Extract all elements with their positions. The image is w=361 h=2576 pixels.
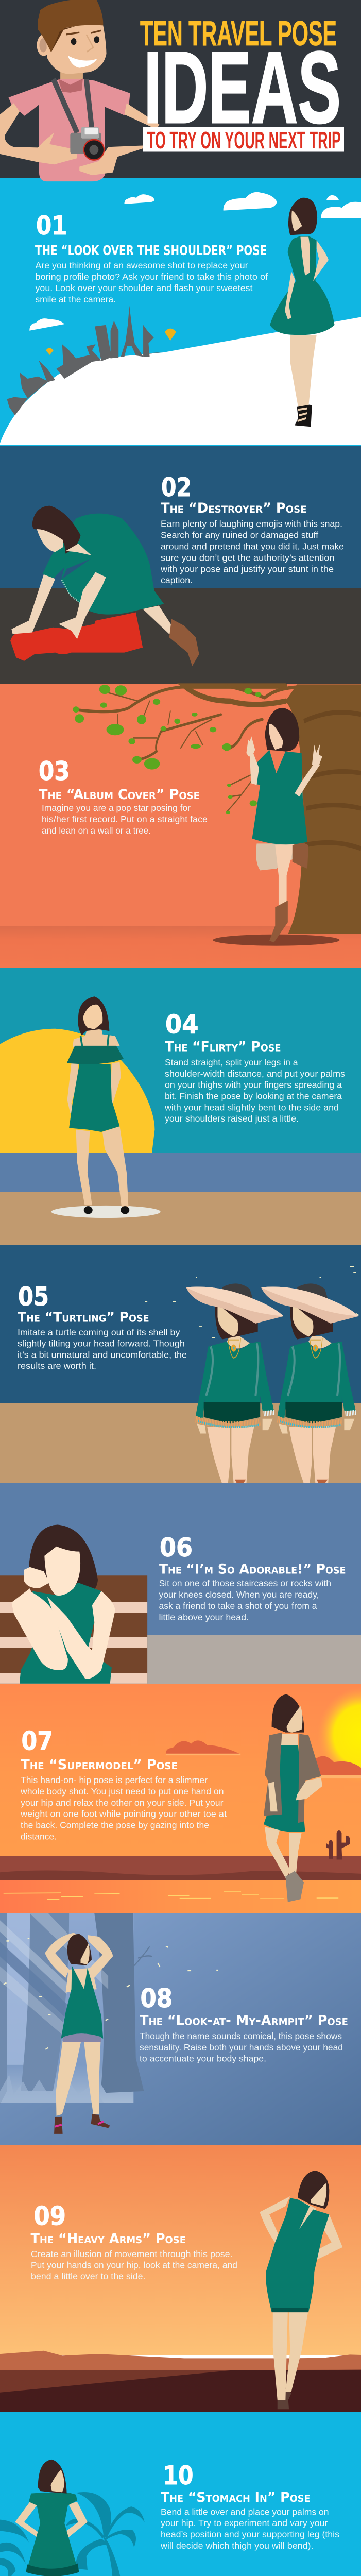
heading: The “Album Cover” Pose [39,787,200,803]
body text [20,1775,227,1842]
body text: caption. [161,575,193,585]
panel: pose 08 look at my armpit [0,1913,361,2145]
body text: your knees closed. When you are ready, [159,1589,319,1600]
panel: pose 05 turtling [0,1245,361,1484]
body text: smile at the camera. [35,294,116,304]
shadow [213,935,339,946]
body text: sure you don’t get the authority’s attention [161,552,335,563]
number 10: 10 [163,2461,194,2490]
figure: woman crouching over red suitcase [10,506,199,666]
sky background [0,2412,361,2576]
figure: woman front left [196,1336,274,1484]
figure: woman with arms raised [45,1933,113,2134]
heading: The “Flirty” Pose [165,1039,281,1055]
body text: your shoulders raised just a little. [165,1113,299,1124]
figure: woman with hands on hips [260,2171,342,2409]
background [0,1913,361,2145]
hat and head left [186,1283,284,1339]
body text: bend a little over to the side. [31,2271,145,2281]
heading: The “Destroyer” Pose [161,500,307,516]
body text: Bend a little over and place your palms on [161,2506,329,2517]
floor [0,926,361,968]
heading: THE “LOOK OVER THE SHOULDER” POSE [35,243,267,259]
heading: The “Turtling” Pose [18,1310,149,1325]
floor [0,1635,361,1684]
sky background [0,178,361,446]
illustration: palms, island and woman [0,2460,361,2576]
panel: pose 10 stomach in [0,2412,361,2576]
scene: clouds, hill and skyline [0,192,361,445]
body text: Put your hands on your hip, look at the camera, and [31,2260,237,2270]
figure: woman with hand on hip [264,1694,322,1902]
panel: pose 09 heavy arms [0,2145,361,2412]
illustration: desert and woman [0,1687,361,1913]
illustration: two women in sun hats [145,1266,359,1484]
heading: The “Supermodel” Pose [21,1757,178,1773]
panel: pose 02 destroyer [0,446,361,684]
body text: Stand straight, split your legs in a [165,1057,298,1067]
background wall [0,1483,361,1635]
number 09: 09 [34,2201,66,2231]
heading: The “Heavy Arms” Pose [31,2231,186,2247]
body text [35,260,268,304]
body text: with your head slightly bent to the side and [164,1103,339,1113]
body text: Imagine you are a pop star posing for [42,803,191,813]
body text: around and pretend that you did it. Just make [161,541,344,551]
sand [0,1403,361,1483]
body text: results are worth it. [18,1361,96,1371]
background wall [0,446,361,588]
background floor [0,588,361,684]
body text: Sit on one of those staircases or rocks with [159,1578,331,1588]
body text: his/her first record. Put on a straight face [42,814,208,824]
illustration: tree and posing woman [73,684,361,946]
panel: header [0,0,361,181]
body text: Imitate a turtle coming out of its shell by [18,1327,180,1337]
body text: your hip and relax the other on your side. Put your [21,1798,224,1808]
panel: pose 06 so adorable [0,1483,361,1684]
body text [160,2506,339,2551]
body text: and lean on a wall or a tree. [42,825,151,836]
body text: slightly tilting your head forward. Though [18,1338,185,1349]
body text: it’s a bit unnatural and uncomfortable, the [18,1349,187,1360]
header background [0,0,361,178]
body text: your hip. Try to experiment and vary your [161,2518,328,2528]
hat and head right [261,1283,359,1339]
body text: will decide which thigh you will bend). [160,2540,313,2551]
figure: woman in green dress [67,996,129,1214]
body text: head’s position and your supporting leg (this [161,2529,339,2539]
body text: shoulder-width distance, and put your palms [165,1069,345,1079]
number 02: 02 [161,472,192,502]
body text [164,1057,345,1124]
body text: to accentuate your body shape. [140,2054,266,2064]
figure: seated woman with arms crossed [11,1525,115,1684]
body text: bit. Finish the pose by looking at the camera [165,1091,342,1101]
panel: pose 03 album cover [0,684,361,968]
body text: sensuality. Raise both your hands above your head [140,2042,343,2053]
body text: ask a friend to take a shot of you from a [159,1601,317,1611]
number 03: 03 [39,756,70,786]
body text: weight on one foot while pointing your other toe at [20,1809,227,1819]
sunset background [0,1684,361,1913]
illustration: man with camera [0,0,159,181]
heading: The “Stomach In” Pose [161,2489,310,2505]
body text: boring profile photo? Ask your friend to take this photo of [35,272,268,282]
body text [160,518,344,585]
body text [140,2031,343,2064]
body text [31,2249,237,2281]
figure: woman with palms on hips [15,2460,88,2576]
figure: woman leaning on tree [246,708,322,942]
body text: distance. [21,1832,57,1842]
body text: This hand-on- hip pose is perfect for a slimmer [21,1775,208,1785]
panel: pose 01 look over the shoulder [0,178,361,446]
sky [0,968,361,1153]
illustration: woman on bench [0,1525,147,1684]
sand [0,1192,361,1245]
body text: Earn plenty of laughing emojis with this snap. [161,518,342,529]
body text: on your thighs with your fingers spreading a [165,1080,342,1090]
body text: whole body shot. You just need to put one hand on [20,1786,224,1797]
body text: Create an illusion of movement through this pose. [31,2249,233,2259]
panel: pose 07 supermodel [0,1684,361,1913]
number 07: 07 [22,1726,53,1756]
illustration: mountains and woman [0,2171,361,2412]
sunset sky [0,2145,361,2355]
body text [18,1327,187,1371]
body text: with your pose and justify your stunt in the [160,564,334,574]
wall background [0,684,361,926]
heading: The “I’m So Adorable!” Pose [159,1561,346,1578]
body text: little above your head. [159,1612,249,1622]
number 01: 01 [36,211,67,241]
body text: Though the name sounds comical, this pose shows [140,2031,342,2041]
illustration: forest and woman [0,1913,218,2134]
sea [0,1153,361,1192]
heading: The “Look-at- My-Armpit” Pose [140,2012,348,2029]
number 05: 05 [18,1282,49,1312]
body text: Are you thinking of an awesome shot to replace your [35,260,248,270]
figure: woman front right [278,1336,356,1484]
panel: pose 04 flirty [0,968,361,1245]
figure: woman from behind in green dress [270,198,335,427]
body text: you. Look over your shoulder and flash your sweetest [35,283,253,293]
illustration: sun and standing woman [0,996,161,1218]
number 08: 08 [140,1984,173,2013]
body text: the back. Complete the pose by gazing into the [21,1820,209,1831]
body text [42,803,208,836]
body text: Search for any ruined or damaged stuff [161,530,318,540]
number 04: 04 [165,1010,199,1040]
number 06: 06 [160,1533,193,1563]
background sky [0,1245,361,1403]
body text [159,1578,331,1622]
